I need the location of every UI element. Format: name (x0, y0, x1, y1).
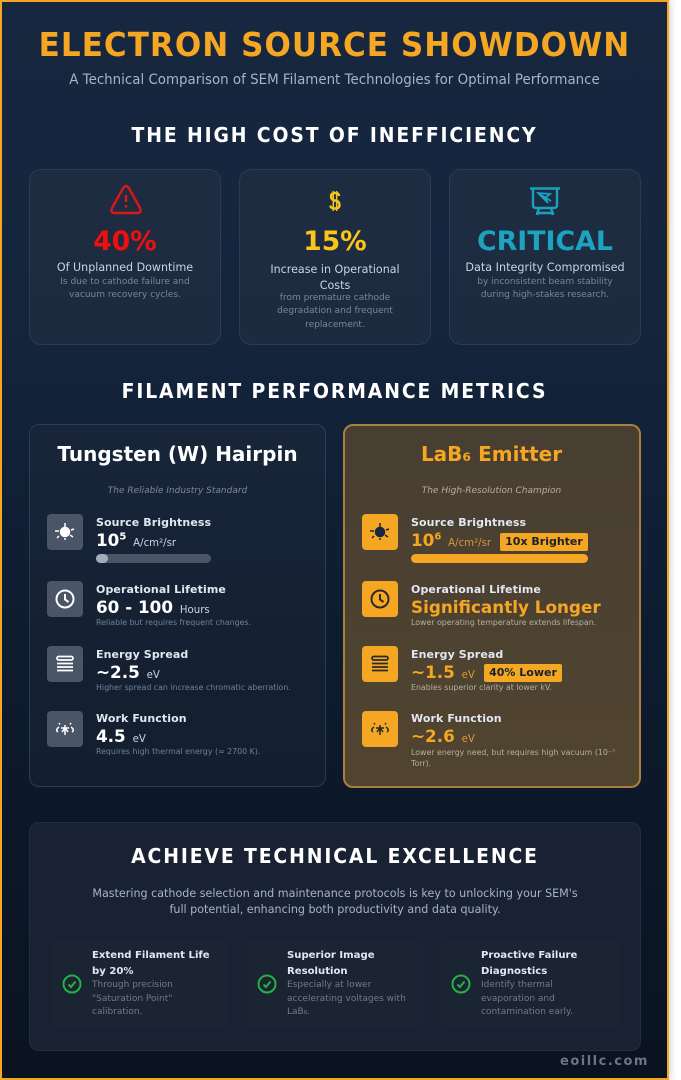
note: Enables superior clarity at lower kV. (411, 683, 552, 692)
stat description (477, 277, 613, 300)
icon: check (452, 974, 470, 994)
metric: operational lifetime: Operational Lifetime (96, 583, 226, 596)
badge: 40% lower (484, 664, 562, 682)
stat description: vacuum recovery cycles. (69, 290, 181, 300)
stat description: by inconsistent beam stability (477, 277, 613, 287)
LaB6 tagline: The High-Resolution Champion (422, 486, 561, 496)
metric: source brightness: Source Brightness (96, 516, 211, 529)
stat label: Costs (320, 278, 350, 292)
summary text: Mastering cathode selection and maintenance protocols is key to unlocking your SEM's (92, 886, 578, 900)
benefit text: evaporation and (481, 994, 555, 1004)
stat label: Data Integrity Compromised (465, 260, 625, 274)
title: ELECTRON SOURCE SHOWDOWN (39, 25, 630, 64)
stat: critical: CRITICAL (477, 226, 613, 257)
metric: energy spread: Energy Spread (96, 648, 188, 661)
heading: the high cost of inefficiency: THE HIGH COST OF INEFFICIENCY (132, 123, 537, 147)
benefit text: calibration. (92, 1007, 142, 1017)
stat description: replacement. (305, 320, 365, 330)
benefit text: Especially at lower (287, 980, 371, 990)
benefit text: Diagnostics (481, 966, 547, 977)
benefit text: "Saturation Point" (92, 994, 172, 1004)
note: Reliable but requires frequent changes. (96, 618, 251, 627)
icon: presentation board (530, 187, 560, 216)
benefit text: accelerating voltages with (287, 994, 406, 1004)
benefit: superior image resolution (247, 939, 423, 1028)
panel: achieve technical excellence (29, 822, 641, 1051)
benefit text: contamination early. (481, 1007, 573, 1017)
icon: warning triangle (110, 184, 142, 214)
metric: source brightness: Source Brightness (411, 516, 526, 529)
benefit: extend filament life (52, 939, 229, 1028)
stat description: degradation and frequent (277, 306, 393, 316)
metric: work function: Work Function (411, 712, 502, 725)
value: 2.6 eV: ~2.6 eV (411, 726, 475, 746)
icon: atom (362, 711, 398, 747)
summary text (92, 886, 578, 916)
heading: achieve technical excellence: ACHIEVE TECHNICAL EXCELLENCE (131, 844, 539, 868)
benefit: proactive failure diagnostics (441, 939, 618, 1028)
badge: 10x brighter (500, 533, 588, 551)
benefit text: LaB₆. (287, 1007, 310, 1017)
value: 10^6: 106 A/cm²/sr (411, 530, 491, 550)
bar: brightness (96, 554, 211, 563)
watermark: eoillc.com (560, 1054, 649, 1069)
benefit text (481, 950, 577, 1017)
stat description: Is due to cathode failure and (60, 277, 190, 287)
metric: work function: Work Function (96, 712, 187, 725)
benefit text: Resolution (287, 966, 348, 977)
value: 10^5: 105 A/cm²/sr (96, 530, 176, 550)
icon: clock (362, 581, 398, 617)
value: 2.5 eV: ~2.5 eV (96, 662, 160, 682)
stat label: Increase in Operational (270, 262, 400, 276)
benefit text: Superior Image (287, 950, 375, 961)
value: significantly longer: Significantly Longer (411, 597, 601, 617)
metric: energy spread: Energy Spread (411, 648, 503, 661)
stat: 40%: 40% (93, 226, 157, 257)
icon: layers (362, 646, 398, 682)
benefit text (92, 950, 210, 1017)
icon: layers (47, 646, 83, 682)
tungsten heading: Tungsten (W) Hairpin (57, 442, 298, 466)
stat description: from premature cathode (280, 293, 390, 303)
benefit text: Extend Filament Life (92, 950, 210, 961)
icon: dollar (329, 191, 341, 211)
value: 1.5 eV: ~1.5 eV (411, 662, 475, 682)
benefit text: Through precision (92, 980, 173, 990)
icon: sun (362, 514, 398, 550)
note: Requires high thermal energy (≈ 2700 K). (96, 747, 260, 756)
stat description: during high-stakes research. (481, 290, 609, 300)
value: 4.5 eV: 4.5 eV (96, 726, 146, 746)
icon: sun (47, 514, 83, 550)
icon: atom (47, 711, 83, 747)
note (411, 748, 615, 768)
stat description (60, 277, 190, 300)
badge: 10x brighter: 10x Brighter (505, 535, 583, 548)
value: 60-100 hours: 60 - 100 Hours (96, 597, 210, 617)
metric: operational lifetime: Operational Lifetime (411, 583, 541, 596)
badge: 40% lower: 40% Lower (489, 666, 557, 679)
benefit text: by 20% (92, 966, 133, 977)
note: Higher spread can increase chromatic aberration. (96, 683, 291, 692)
note: Torr). (411, 759, 431, 768)
panel: tungsten hairpin (29, 424, 326, 787)
panel: LaB6 emitter (343, 424, 641, 788)
note: Lower operating temperature extends lifespan. (411, 618, 596, 627)
benefit text: Proactive Failure (481, 950, 577, 961)
stat label: Of Unplanned Downtime (57, 260, 193, 274)
tungsten tagline: The Reliable Industry Standard (108, 486, 247, 496)
icon: check (62, 974, 82, 994)
LaB6 heading: LaB₆ Emitter (421, 442, 562, 466)
benefit text (287, 950, 406, 1017)
icon: check (258, 974, 276, 994)
heading: filament performance metrics: FILAMENT PERFORMANCE METRICS (122, 379, 547, 403)
bar: brightness (411, 554, 588, 563)
panel: downtime card (29, 169, 221, 345)
benefit text: Identify thermal (481, 980, 553, 990)
panel: operational cost card (239, 169, 431, 345)
stat: 15%: 15% (303, 226, 367, 257)
note: Lower energy need, but requires high vacuum (10⁻⁷ (411, 748, 615, 757)
subtitle: A Technical Comparison of SEM Filament Technologies for Optimal Performance (69, 72, 600, 88)
stat label (270, 262, 400, 292)
icon: clock (47, 581, 83, 617)
panel: data integrity card (449, 169, 641, 345)
summary text: full potential, enhancing both productivity and data quality. (169, 902, 501, 916)
stat description (277, 293, 393, 330)
